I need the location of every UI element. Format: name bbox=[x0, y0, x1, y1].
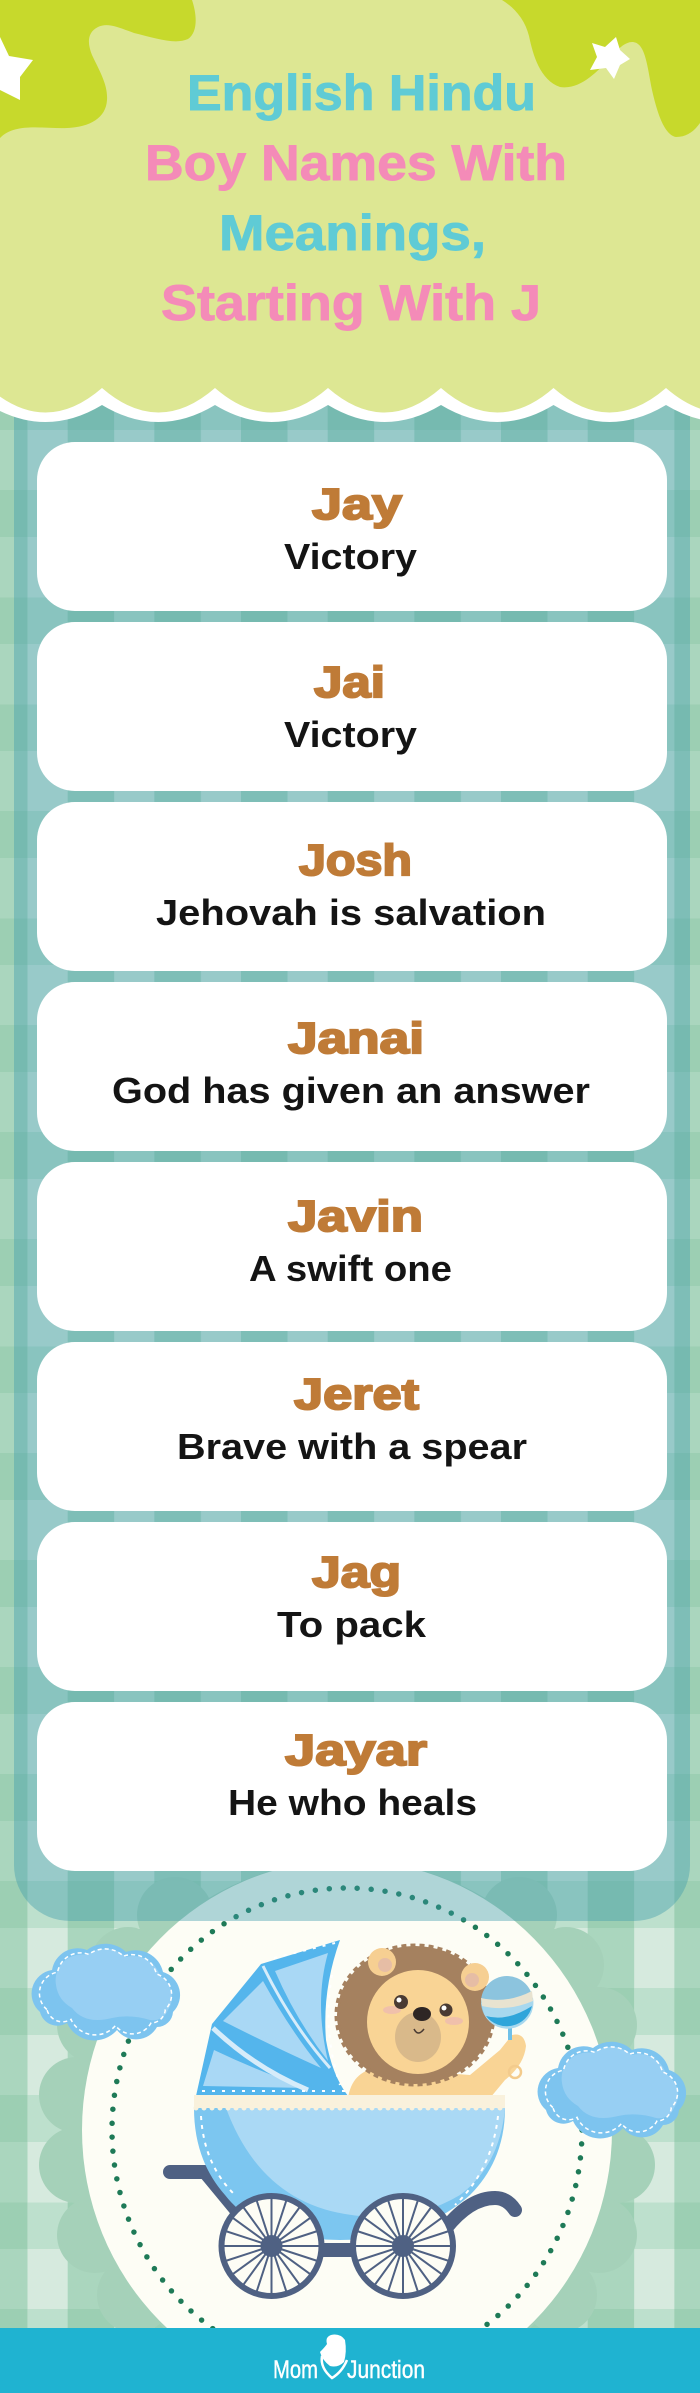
card: Jeret: Brave with a spear bbox=[177, 1426, 527, 1467]
stroller trim bbox=[194, 2095, 505, 2108]
stroller hood bbox=[196, 1940, 348, 2096]
card: Jag: To pack bbox=[277, 1604, 427, 1645]
card: Jay bbox=[37, 442, 667, 611]
card: Javin bbox=[37, 1162, 667, 1331]
icon: right cloud bbox=[538, 2042, 686, 2138]
card: Janai: God has given an answer bbox=[112, 1070, 590, 1111]
lion mane bbox=[337, 1946, 493, 2084]
header banner bbox=[0, 0, 700, 422]
rattle ring bbox=[509, 2066, 521, 2078]
card: Janai: Janai bbox=[288, 1014, 424, 1063]
stroller frame bbox=[170, 2172, 515, 2250]
card: Josh bbox=[37, 802, 667, 971]
lion cheeks bbox=[383, 2006, 463, 2025]
lion ears bbox=[368, 1948, 489, 1991]
title line 4: Starting With J bbox=[161, 275, 541, 331]
card: Jayar: Jayar bbox=[285, 1726, 427, 1775]
title line 3: Meanings, bbox=[219, 205, 486, 261]
card: Jeret bbox=[37, 1342, 667, 1511]
logo icon: mother and baby bbox=[320, 2335, 347, 2378]
card: Josh: Jehovah is salvation bbox=[156, 892, 546, 933]
card: Josh: Josh bbox=[299, 836, 412, 885]
card: Jayar: He who heals bbox=[228, 1782, 477, 1823]
icon: lion holding rattle bbox=[337, 1946, 533, 2098]
icon: baby stroller bbox=[170, 1940, 515, 2296]
lion smile bbox=[414, 2029, 424, 2033]
star left bbox=[0, 37, 33, 100]
card: Jag: Jag bbox=[312, 1548, 401, 1597]
top-left green blob bbox=[0, 0, 196, 138]
top-right green blob bbox=[502, 0, 700, 137]
lion face bbox=[367, 1970, 469, 2074]
lion eyes bbox=[394, 1995, 452, 2016]
card: Jeret: Jeret bbox=[294, 1370, 419, 1419]
lion body bbox=[348, 2034, 526, 2098]
title bbox=[145, 65, 567, 331]
logo: MomJunction bbox=[273, 2335, 425, 2384]
rattle bbox=[481, 1976, 533, 2040]
lion muzzle bbox=[395, 2012, 441, 2062]
card: Jayar bbox=[37, 1702, 667, 1871]
scalloped lace behind the circle bbox=[39, 1860, 655, 2393]
card: Jay: Jay bbox=[312, 480, 403, 529]
card: Jai bbox=[37, 622, 667, 791]
card: Jai: Victory bbox=[284, 714, 417, 755]
card: Javin: Javin bbox=[288, 1192, 423, 1241]
card: Janai bbox=[37, 982, 667, 1151]
lion nose bbox=[413, 2007, 431, 2021]
teal panel behind name cards bbox=[14, 300, 690, 1921]
right wheel bbox=[353, 2196, 453, 2296]
footer bar bbox=[0, 2328, 700, 2393]
cream circle bbox=[82, 1860, 612, 2393]
logo text Junction: Junction bbox=[347, 2356, 425, 2384]
card: Jay: Victory bbox=[284, 536, 417, 577]
icon: left cloud bbox=[32, 1944, 180, 2040]
card: Jag bbox=[37, 1522, 667, 1691]
star right bbox=[590, 37, 630, 79]
card: Javin: A swift one bbox=[249, 1248, 452, 1289]
logo text Mom: Mom bbox=[273, 2356, 318, 2384]
title line 2: Boy Names With bbox=[145, 135, 567, 191]
stroller basket bbox=[194, 2108, 505, 2240]
card: Jai: Jai bbox=[314, 658, 385, 707]
title line 1: English Hindu bbox=[187, 65, 536, 121]
dotted ring bbox=[112, 1888, 582, 2372]
left wheel bbox=[222, 2196, 322, 2296]
